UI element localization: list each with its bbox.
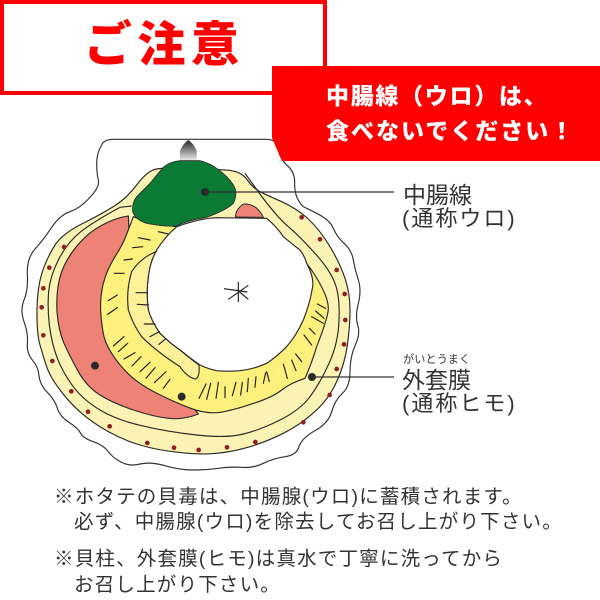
- note 2 line 2: お召し上がり下さい。: [74, 574, 281, 596]
- black marker dots: [91, 362, 186, 401]
- warning line 1: 中腸線（ウロ）は、: [326, 83, 548, 109]
- mantle inner line: [48, 173, 339, 436]
- green digestive gland: [132, 161, 236, 226]
- adductor muscle white centre: [147, 218, 313, 371]
- asterisk mark at centre: [224, 282, 248, 302]
- mantle cream band: [37, 168, 350, 454]
- salmon gonad: [57, 216, 198, 419]
- note block: [54, 486, 563, 596]
- small salmon patch: [236, 204, 263, 217]
- leader line: digestive gland: [201, 188, 394, 196]
- hinge: [180, 140, 197, 161]
- heading text: ご注意: [84, 19, 245, 72]
- label line 1: 外套膜: [402, 367, 471, 393]
- shell diagram: [21, 138, 361, 471]
- gill hatch marks: [108, 232, 326, 399]
- label: mantle: [402, 353, 517, 416]
- red warning banner: [272, 66, 600, 161]
- red edge dots: [39, 215, 348, 452]
- label line 2: (通称ウロ): [402, 206, 517, 231]
- warning line 2: 食べないでください！: [326, 118, 575, 144]
- label: digestive gland: [402, 182, 517, 231]
- note 1 line 1: ※ホタテの貝毒は、中腸腺(ウロ)に蓄積されます。: [54, 486, 523, 508]
- heading box: [0, 0, 327, 95]
- note 1 line 2: 必ず、中腸腺(ウロ)を除去してお召し上がり下さい。: [74, 511, 563, 533]
- note 2 line 1: ※貝柱、外套膜(ヒモ)は真水で丁寧に洗ってから: [54, 548, 503, 570]
- leader line: mantle: [308, 373, 394, 381]
- furigana: がいとうまく: [403, 354, 470, 366]
- inner gill lobe: [128, 252, 199, 379]
- label line 1: 中腸線: [403, 182, 472, 208]
- outer shell outline: [22, 139, 360, 470]
- yellow gill: [101, 217, 328, 413]
- label line 2: (通称ヒモ): [402, 391, 517, 416]
